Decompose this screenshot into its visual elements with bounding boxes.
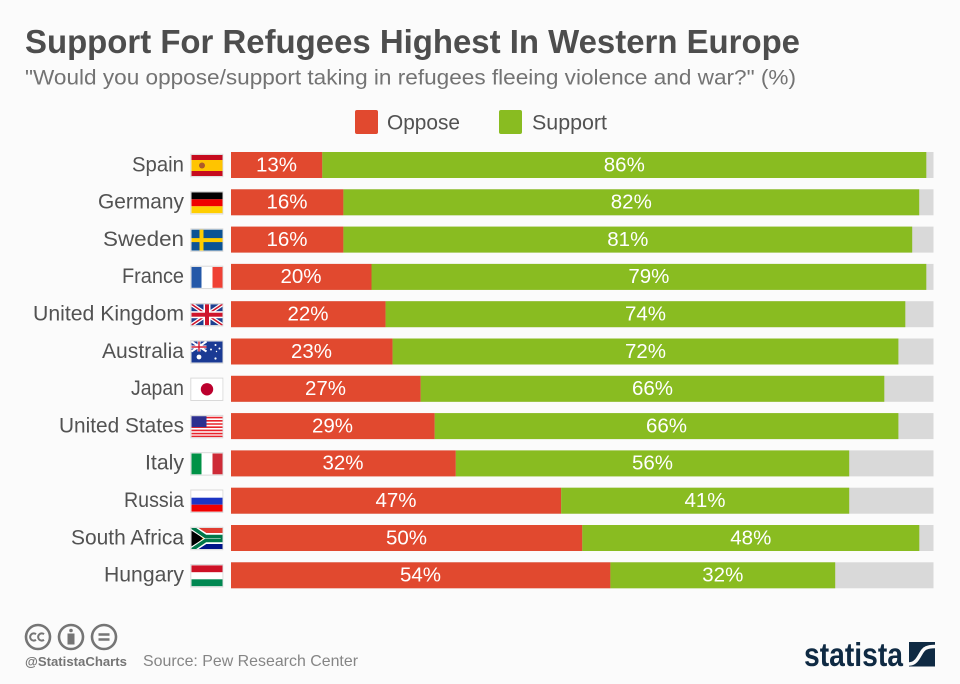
row: Germany: 82% — [611, 191, 652, 214]
row: Germany — [98, 189, 934, 215]
row: Italy: 56% — [632, 452, 673, 475]
logo: statista: statista — [804, 636, 904, 673]
row: Russia: 47% — [375, 489, 417, 512]
row: Hungary — [104, 562, 934, 588]
title: Support For Refugees Highest In Western Europe — [25, 24, 800, 61]
row: Japan: 66% — [632, 377, 673, 400]
row: France — [122, 264, 934, 290]
icon: creative commons licence — [26, 625, 116, 649]
row: Australia — [102, 338, 934, 364]
subtitle: "Would you oppose/support taking in refugees fleeing violence and war?" (%) — [25, 66, 796, 90]
row: Sweden: Sweden — [103, 228, 184, 251]
row: Japan: 27% — [305, 377, 346, 400]
row: United Kingdom: 22% — [287, 302, 329, 326]
legend — [355, 110, 607, 134]
row: Germany: 16% — [266, 191, 308, 214]
row: Spain: Spain — [132, 153, 184, 176]
row: South Africa: 48% — [730, 526, 771, 549]
row: Japan — [131, 376, 934, 402]
row: Australia: 23% — [291, 340, 332, 363]
row: Hungary: 54% — [400, 564, 441, 587]
row: United States: United States — [59, 414, 184, 437]
row: Australia: Australia — [102, 340, 184, 363]
row: France: 20% — [280, 265, 322, 288]
row: Spain: 86% — [604, 153, 645, 176]
row: Russia: 41% — [684, 489, 726, 512]
row: Italy — [145, 450, 934, 476]
row: United Kingdom — [33, 301, 934, 327]
row: Japan: Japan — [131, 377, 184, 400]
row: Hungary: 32% — [702, 564, 743, 587]
row: France: 79% — [628, 265, 669, 288]
row: Sweden: 16% — [266, 228, 308, 251]
row: France: France — [122, 265, 184, 288]
row: Russia — [124, 488, 934, 514]
row: South Africa: South Africa — [71, 526, 184, 549]
row: United States: 66% — [646, 414, 687, 437]
handle: @StatistaCharts — [25, 655, 127, 669]
row: Sweden — [103, 227, 934, 253]
legend: Oppose — [387, 112, 460, 134]
legend: Support — [532, 112, 607, 134]
row: United Kingdom: 74% — [625, 302, 666, 326]
source: Source: Pew Research Center — [143, 653, 359, 670]
row: Spain — [132, 152, 934, 178]
row: South Africa — [71, 525, 934, 551]
row: Spain: 13% — [256, 153, 297, 176]
row: Italy: 32% — [322, 452, 364, 475]
row: Italy: Italy — [145, 452, 185, 475]
row: United States: 29% — [312, 414, 353, 437]
row: Germany: Germany — [98, 191, 184, 214]
row: Sweden: 81% — [607, 228, 648, 251]
row: South Africa: 50% — [386, 526, 427, 549]
row: Russia: Russia — [124, 489, 184, 512]
row: United Kingdom: United Kingdom — [33, 302, 184, 326]
row: Hungary: Hungary — [104, 564, 184, 587]
row: United States — [59, 413, 934, 439]
row: Australia: 72% — [625, 340, 666, 363]
